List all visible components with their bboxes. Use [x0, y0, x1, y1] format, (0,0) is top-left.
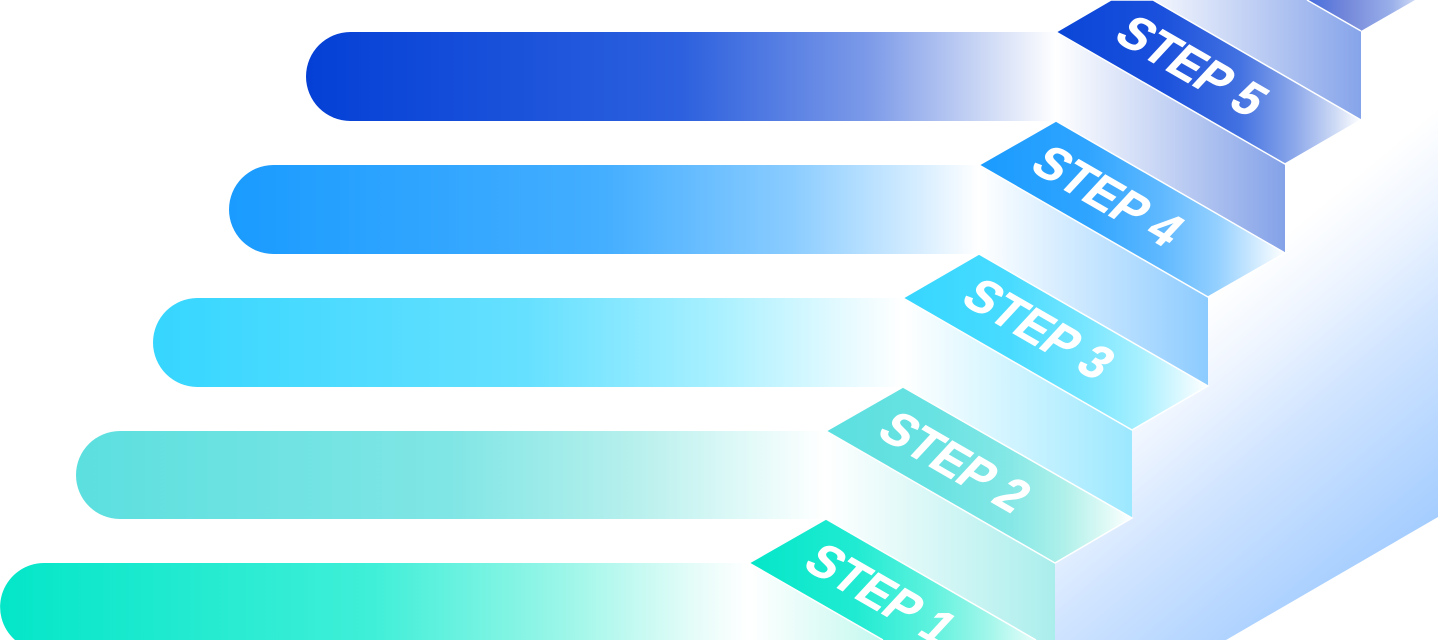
riser 5 — [1056, 32, 1285, 253]
label: STEP 4: STEP 4 — [1021, 136, 1196, 256]
tread 4 — [979, 121, 1285, 297]
riser 2 — [826, 431, 1055, 640]
riser 3 — [903, 298, 1132, 518]
label: STEP 2: STEP 2 — [868, 402, 1043, 522]
bar 5 — [306, 32, 1056, 121]
step 1 — [0, 519, 1036, 640]
side face of staircase — [1055, 0, 1438, 640]
tread 3 — [903, 254, 1208, 430]
label: STEP 5: STEP 5 — [1105, 6, 1280, 126]
top step — [1153, 0, 1415, 120]
bar 3 — [153, 298, 903, 387]
label: STEP 3: STEP 3 — [952, 269, 1127, 389]
tread 2 — [826, 387, 1132, 563]
step 2 — [76, 387, 1132, 640]
bar 4 — [229, 165, 979, 254]
riser 1 — [749, 563, 883, 640]
bar 2 — [76, 431, 826, 519]
bar 1 — [0, 563, 749, 640]
step 5 — [306, 0, 1361, 253]
tread 1 — [749, 519, 1036, 640]
tread 1 edge lines — [749, 519, 1036, 640]
riser 4 — [979, 165, 1208, 386]
tread 5 — [1056, 0, 1361, 164]
step 3 — [153, 254, 1208, 518]
step 4 — [229, 121, 1285, 386]
